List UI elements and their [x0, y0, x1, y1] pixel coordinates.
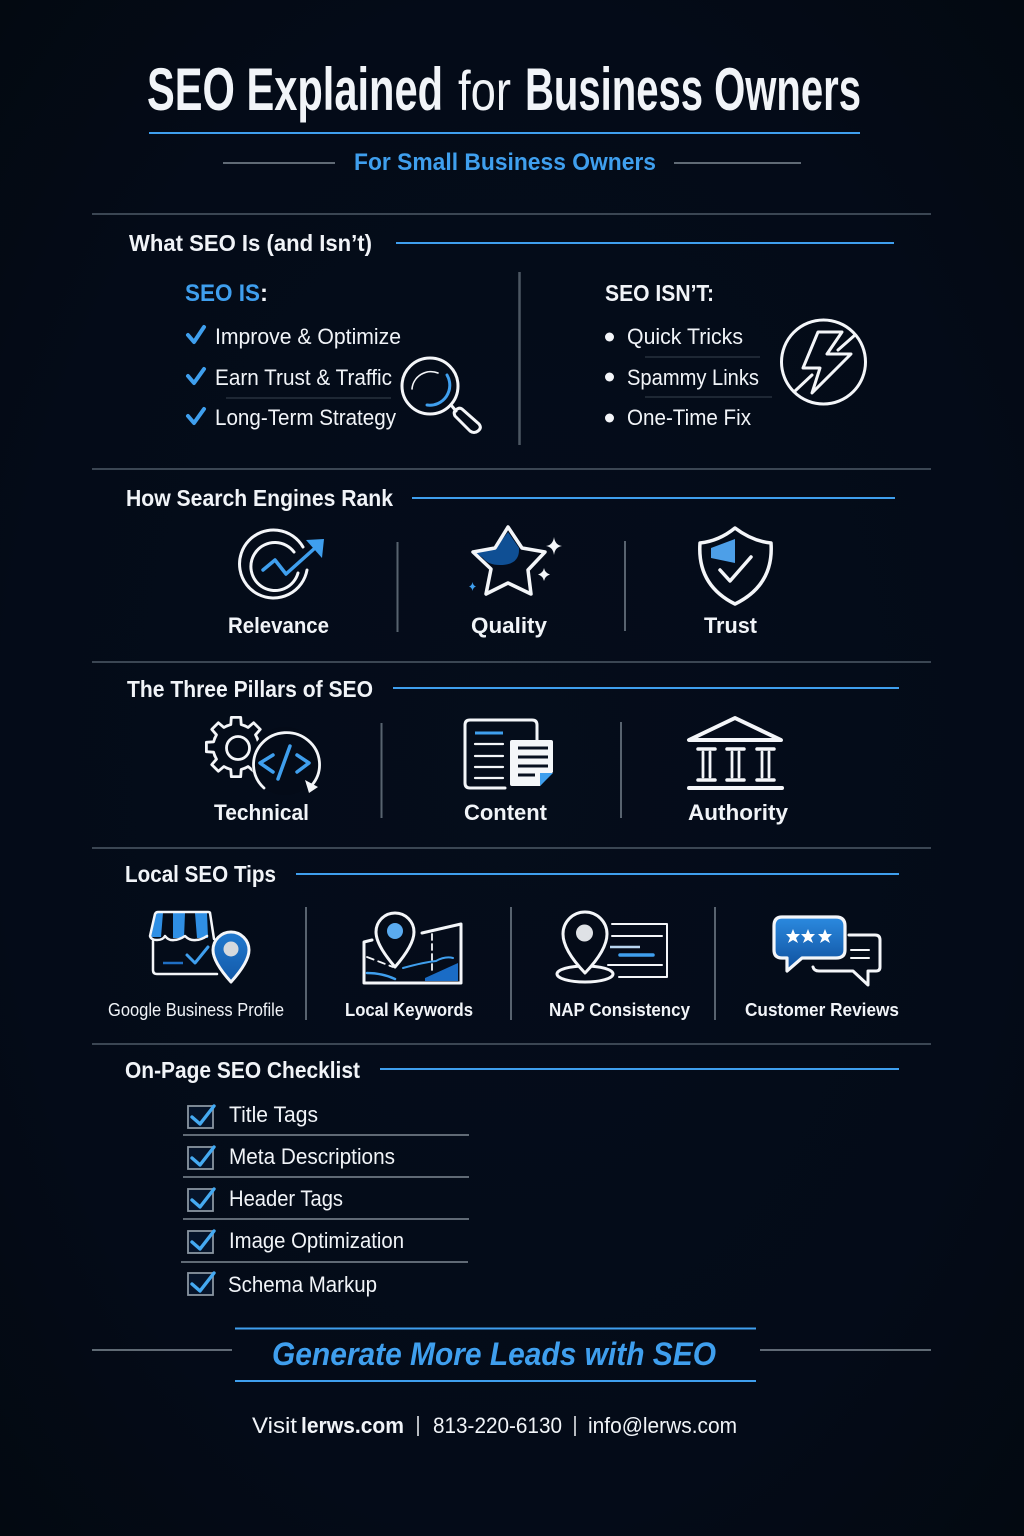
icon: crossed lightning — [782, 320, 866, 404]
heading: local SEO: Local SEO Tips — [125, 861, 276, 887]
footer contact line: info@lerws.com — [588, 1413, 737, 1438]
checklist item: header tags: Header Tags — [229, 1186, 343, 1211]
heading: checklist: On-Page SEO Checklist — [125, 1057, 360, 1083]
label: local keywords: Local Keywords — [345, 999, 473, 1020]
callout: generate more leads: Generate More Leads with SEO — [272, 1336, 716, 1372]
heading: what SEO is: What SEO Is (and Isn’t) — [129, 230, 372, 256]
checklist item: meta descriptions: Meta Descriptions — [229, 1144, 395, 1169]
icon: authority building — [689, 718, 782, 788]
SEO IS column: Improve & Optimize — [215, 324, 401, 349]
heading: rank: How Search Engines Rank — [126, 485, 393, 511]
label: relevance: Relevance — [228, 613, 329, 638]
icon: magnifying glass — [402, 358, 480, 432]
icon: star — [469, 527, 562, 594]
icon: map with pin — [364, 913, 461, 983]
column divider — [518, 272, 521, 445]
icon: review bubbles — [774, 917, 880, 985]
panel: local SEO tips — [108, 861, 899, 1020]
SEO ISN'T column: One-Time Fix — [627, 405, 751, 430]
SEO ISN'T column: Quick Tricks — [627, 324, 743, 349]
title — [147, 56, 861, 133]
footer contact line: Visit — [252, 1413, 297, 1438]
icon: technical gear and code — [206, 717, 320, 795]
panel: what SEO is and isn't — [129, 230, 894, 445]
panel: how search engines rank — [126, 485, 895, 638]
SEO IS column: SEO IS — [185, 280, 260, 307]
label: NAP consistency: NAP Consistency — [549, 999, 691, 1020]
SEO IS column: : — [260, 280, 268, 307]
subtitle: For Small Business Owners — [354, 149, 656, 176]
label: trust: Trust — [704, 613, 758, 638]
checklist item: header tags — [188, 1186, 343, 1211]
footer contact line: 813-220-6130 — [433, 1413, 562, 1438]
icon: shield — [700, 528, 771, 604]
label: google business profile: Google Business Profile — [108, 999, 284, 1020]
label: authority: Authority — [688, 800, 789, 825]
title: Business Owners — [525, 56, 861, 123]
SEO IS column: Long-Term Strategy — [215, 405, 396, 430]
title: for — [458, 59, 511, 122]
SEO IS column — [185, 280, 401, 430]
footer contact line — [252, 1413, 737, 1438]
icon: content documents — [465, 720, 553, 788]
checklist item: title tags: Title Tags — [229, 1102, 318, 1127]
footer contact line: lerws.com — [301, 1413, 404, 1438]
checklist item: image optimization: Image Optimization — [229, 1228, 404, 1253]
SEO ISN'T column: SEO ISN’T: — [605, 280, 714, 306]
label: customer reviews: Customer Reviews — [745, 999, 899, 1020]
checklist item: schema markup: Schema Markup — [228, 1272, 377, 1297]
label: quality: Quality — [471, 613, 548, 638]
panel: on-page checklist — [125, 1057, 899, 1297]
panel: three pillars — [127, 676, 899, 825]
label: technical: Technical — [214, 800, 309, 825]
heading: pillars: The Three Pillars of SEO — [127, 676, 373, 702]
SEO IS column: Earn Trust & Traffic — [215, 365, 392, 390]
SEO ISN'T column — [605, 280, 772, 430]
checklist item: title tags — [188, 1102, 318, 1128]
title: SEO Explained — [147, 56, 443, 123]
icon: location and listing — [557, 912, 667, 982]
icon: store with pin — [150, 912, 249, 982]
SEO ISN'T column: Spammy Links — [627, 365, 759, 390]
icon: relevance — [240, 530, 324, 598]
label: content: Content — [464, 800, 548, 825]
